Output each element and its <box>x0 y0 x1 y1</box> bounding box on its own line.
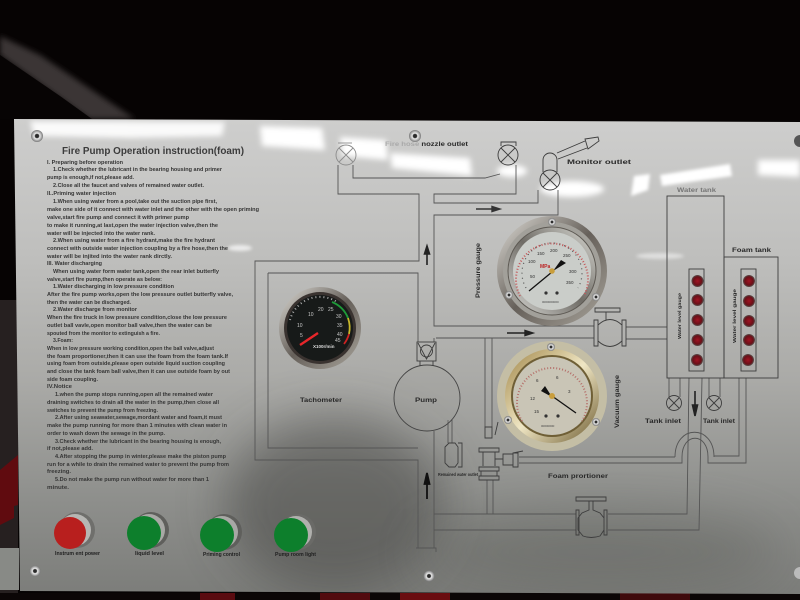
label: monitor outlet: Monitor outlet <box>567 159 632 166</box>
text block: operating instructions: III. Water discharging <box>47 261 103 267</box>
water level gauge: foam tank <box>732 269 756 371</box>
arrow: pump inlet upward <box>424 473 430 499</box>
text block: operating instructions <box>46 160 260 491</box>
text block: operating instructions: if not,please add. <box>47 446 93 452</box>
text block: operating instructions: When the fire truck in low pressure condition,close the low pressure <box>47 315 227 321</box>
gauge: tachometer: 10 <box>297 323 303 329</box>
arrow: tank outlet downward <box>692 391 698 416</box>
button: liquid level <box>127 512 169 557</box>
gauge: tachometer: 5 <box>300 333 303 339</box>
water level gauge: foam tank: Water level gauge <box>732 289 738 343</box>
screw: top centre <box>409 130 421 142</box>
text block: operating instructions: side foam coupling. <box>47 377 98 383</box>
valve: check valve above pump <box>417 342 436 366</box>
text block: operating instructions: make one side of it connect with water inlet and the other with the open priming <box>47 207 260 213</box>
valve: fire hose nozzle outlet <box>336 143 356 165</box>
text block: operating instructions: make the pump running for more than 1 minutes with clean water in <box>47 423 228 429</box>
gauge: pressure gauge: 150 <box>537 251 545 256</box>
text block: operating instructions: switches to prevent the pump from freezing. <box>47 408 158 414</box>
screw: bottom left <box>30 566 40 576</box>
gauge: tachometer: 10 <box>308 312 314 318</box>
text block: operating instructions: outlet ball vavle,open monitor ball valve,then the water can be <box>47 323 212 329</box>
text block: operating instructions: valve,start fire pump,then operate as below: <box>47 277 162 283</box>
text block: operating instructions: IV.Notice <box>47 384 72 390</box>
text block: operating instructions: run for a while to drain the remained water to prevent the pump from <box>47 462 229 468</box>
text block: operating instructions: When using water form water tank,open the rear inlet butterfly <box>53 269 220 275</box>
label: vacuum gauge: Vacuum gauge <box>614 375 621 428</box>
label: water tank: Water tank <box>677 188 717 194</box>
label: remained water outlet: Remained water outlet <box>438 472 478 477</box>
label: foam proportioner: Foam prortioner <box>548 473 609 480</box>
arrow: to monitor outlet <box>476 206 500 212</box>
gauge: tachometer: 30 <box>336 314 342 320</box>
arrow: upward discharge line <box>424 246 430 265</box>
gauge: tachometer: 40 <box>337 332 343 338</box>
water tank <box>667 188 724 378</box>
valve: second nozzle outlet <box>498 142 518 165</box>
valve: tank inlet right <box>706 396 722 410</box>
gauge: tachometer: 20 <box>318 307 324 313</box>
label: tank inlet left: Tank inlet <box>645 418 682 425</box>
text block: operating instructions: 1.when the pump stops running,open all the remained water <box>55 392 214 398</box>
button: instrument power <box>54 512 100 557</box>
gauge: pressure gauge: 0000000000 <box>542 300 559 304</box>
text block: operating instructions: draining switches to drain all the water in the pump,then close all <box>47 400 219 406</box>
text block: operating instructions: 2.When using water from a fire hydrant,make the fire hydrant <box>53 238 215 244</box>
gauge: vacuum gauge: 6 <box>536 378 539 383</box>
text block: operating instructions: 3.Foam: <box>53 338 73 344</box>
diagram: pipe network <box>255 165 746 552</box>
screw: top right <box>794 135 800 147</box>
label: tachometer: Tachometer <box>300 397 343 404</box>
gauge: pressure gauge: 100 <box>528 259 536 264</box>
gauge: tachometer: 45 <box>335 338 341 344</box>
text block: operating instructions: connect with outside water injection coupling by a fire hose,then the <box>47 246 228 252</box>
title: Fire Pump Operation instruction(foam) <box>62 146 244 157</box>
button: priming control <box>200 514 242 558</box>
gauge: pressure gauge <box>497 216 607 326</box>
gauge: pressure gauge: MPa <box>540 264 550 270</box>
arrow: to water tank <box>507 330 533 336</box>
text block: operating instructions: 1.When using water from a pool,take out the suction pipe first, <box>53 199 217 205</box>
text block: operating instructions: and close the tank foam ball valve,then it can use outside foam by out <box>47 369 230 375</box>
valve: foam proportioner assembly <box>479 422 523 480</box>
text block: operating instructions: then the water can be discharged. <box>47 300 131 306</box>
screw: bottom centre <box>424 570 434 582</box>
screw: bottom right <box>794 567 800 579</box>
screw: top left <box>31 130 43 142</box>
text block: operating instructions: I. Preparing before operation <box>47 160 124 166</box>
gauge: vacuum gauge: 12 <box>530 396 536 401</box>
gauge: vacuum gauge: 00000000 <box>541 424 555 428</box>
label: priming control: Priming control <box>203 552 241 558</box>
text block: operating instructions: 2.Water discharge from monitor <box>53 307 138 313</box>
gauge: pressure gauge: 50 <box>530 274 536 279</box>
button: pump room light <box>274 514 316 558</box>
text block: operating instructions: the foam proportioner,then it can use the foam from the foam tank.If <box>47 354 228 360</box>
text block: operating instructions: freezing. <box>47 469 71 475</box>
gauge: tachometer: 35 <box>337 323 343 329</box>
water level gauge: water tank <box>677 269 704 371</box>
pump <box>394 365 460 431</box>
text block: operating instructions: After the fire pump works,open the low pressure outlet butterfly valve, <box>47 292 233 298</box>
gauge: vacuum gauge: 3 <box>568 389 571 394</box>
text block: operating instructions: using foam from outside,please open outside liquid suction coupling <box>47 361 226 367</box>
gauge: tachometer <box>279 287 361 369</box>
gauge: tachometer: X100r/min <box>313 344 335 349</box>
gauge: pressure gauge: 250 <box>563 253 571 258</box>
gauge: pressure gauge: 350 <box>566 280 574 285</box>
gauge: pressure gauge: 300 <box>569 269 577 274</box>
text block: operating instructions: 3.Check whether the lubricant in the bearing housing is enough, <box>55 439 221 445</box>
valve: main gate valve <box>576 497 607 538</box>
text block: operating instructions: II..Priming water injection <box>47 191 117 197</box>
text block: operating instructions: minute. <box>47 485 69 491</box>
gauge: vacuum gauge: 6 <box>556 375 559 380</box>
panel: stainless steel plate <box>14 119 800 594</box>
valve: outlet gate valve to water tank <box>594 308 626 346</box>
label: liquid level: liquid level <box>135 551 165 557</box>
text block: operating instructions: 5.Do not make the pump run without water for more than 1 <box>55 477 209 483</box>
text block: operating instructions: When in low pressure working condition,open the ball valve,adjust <box>47 346 214 352</box>
label: instrument power: Instrum ent power <box>55 551 100 557</box>
text block: operating instructions: spouted from the monitor to extinguish a fire. <box>47 331 160 337</box>
foam tank <box>724 247 778 378</box>
text block: operating instructions: 1.Check whether the lubricant in the bearing housing and primer <box>53 167 223 173</box>
label: foam tank: Foam tank <box>732 247 771 254</box>
gauge: vacuum gauge: 15 <box>534 409 540 414</box>
label: pressure gauge: Pressure gauge <box>475 243 482 298</box>
valve: remained water outlet <box>445 443 462 467</box>
gauge: vacuum gauge <box>497 341 607 451</box>
valve: tank inlet left <box>666 396 682 410</box>
pump: Pump <box>415 397 437 404</box>
text block: operating instructions: water will be injited into the water rank dirctly. <box>46 254 172 260</box>
gauge: pressure gauge: 200 <box>550 248 558 253</box>
text block: operating instructions: 2.Close all the faucet and valves of remained water outlet. <box>53 183 204 189</box>
text block: operating instructions: valve,start fire pump and connect it with primer pump <box>47 215 190 221</box>
water level gauge: water tank: Water level gauge <box>677 293 683 339</box>
text block: operating instructions: 1.Water discharging in low pressure condition <box>53 284 175 290</box>
label: fire hose nozzle outlet: Fire hose nozzle outlet <box>385 141 469 148</box>
label: tank inlet right: Tank inlet <box>703 418 736 425</box>
text block: operating instructions: order to wash down the sewage in the pump. <box>47 431 165 437</box>
text block: operating instructions: pump is enough,if not,please add. <box>47 175 134 181</box>
icon: monitor nozzle and valve <box>540 137 599 190</box>
text block: operating instructions: water will be injected into the water rank. <box>46 231 155 237</box>
gauge: tachometer: 25 <box>328 307 334 313</box>
text block: operating instructions: to make it running,at last,open the water injection valve,then the <box>47 223 218 229</box>
text block: operating instructions: 2.After using seawater,sewage,mordant water and foam,it must <box>55 415 222 421</box>
text block: operating instructions: 4.After stopping the pump in winter,please make the piston pump <box>55 454 227 460</box>
label: pump room light: Pump room light <box>275 552 316 558</box>
